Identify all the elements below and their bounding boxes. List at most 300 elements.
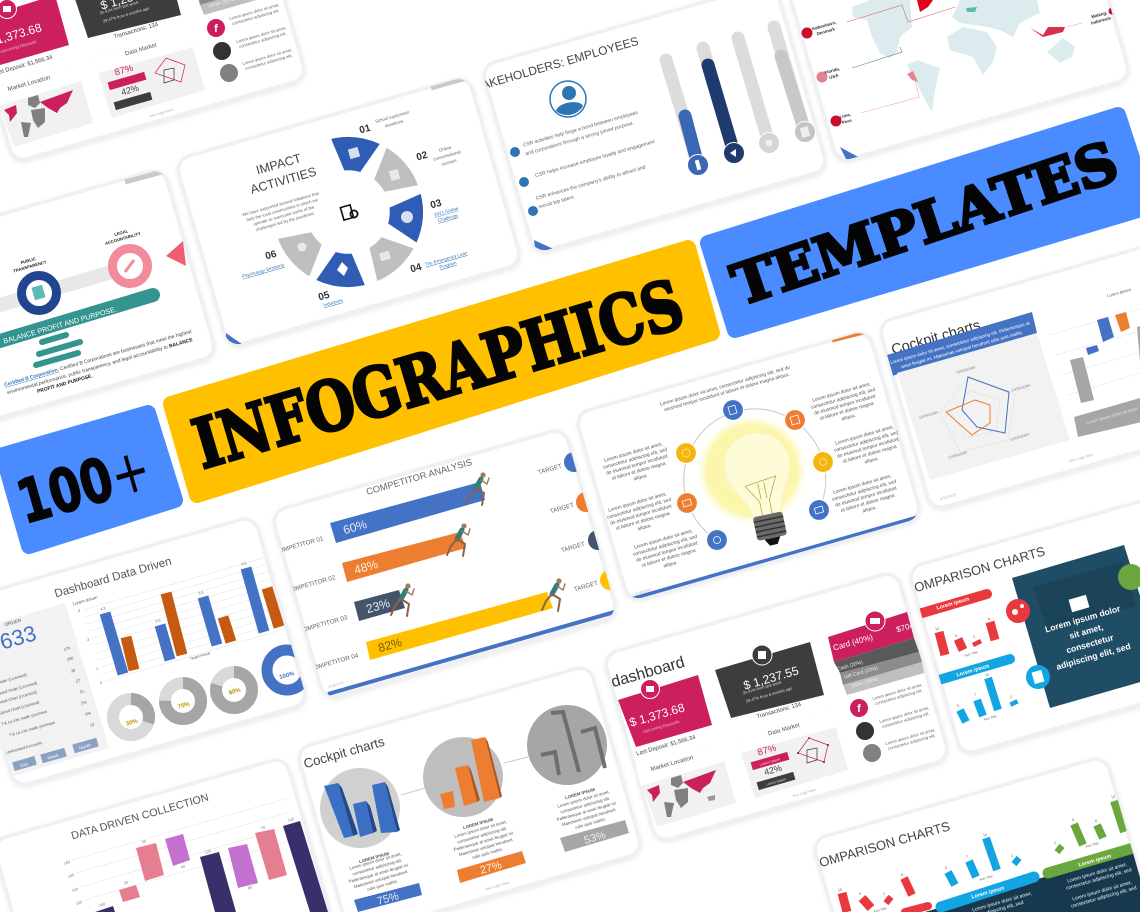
blue chart: 14: [985, 673, 989, 677]
surrounding text blocks: ut labore et dolore magna: [641, 548, 697, 569]
blue band: [880, 312, 1037, 378]
segment labels: School equipment: [374, 109, 410, 124]
bullet list: CSR enhances the company's ability to attract and: [535, 165, 646, 202]
connector lines: [847, 5, 1082, 113]
panel: dashboard: [603, 571, 950, 842]
percent box 53%: 53%: [583, 829, 607, 847]
bar chart: 3: [87, 638, 89, 642]
order panel: [0, 603, 109, 780]
description text: operate to overcome some of the: [253, 204, 315, 227]
blue chart: [941, 833, 1034, 907]
text column 1: consectetur adipiscing elit.: [352, 858, 403, 877]
panel: dashboard preview cropped at top left: [0, 0, 307, 162]
panel: light bulb infographic: [575, 330, 922, 601]
gray text band: [1074, 398, 1140, 437]
order panel: Week: [47, 752, 60, 761]
order panel: Month: [78, 742, 92, 751]
surrounding text blocks: do eiusmod tempor incididunt: [609, 503, 673, 527]
location labels: København,: [811, 20, 837, 31]
data market panel: Lorem Ipsum: [765, 777, 787, 787]
bullet list: CSR activities help forge a bond between employees: [522, 110, 639, 149]
icon circles: [1006, 564, 1140, 689]
pink arrow: [166, 241, 186, 266]
dark teal panel: consectetur: [1065, 632, 1115, 655]
blue chart: 2: [1009, 695, 1013, 699]
data market panel: Lorem Ipsum: [759, 757, 781, 767]
blue chart: 7: [973, 693, 977, 697]
pink deposit block: Upcoming Deposits: [642, 719, 681, 734]
market location map: Market Location: [650, 754, 695, 773]
text column 3: consectetur adipiscing elit.: [560, 796, 611, 815]
surrounding text blocks: do eiusmod tempor incididunt: [836, 436, 900, 460]
dark balance block: 29.47% from 6 months ago: [745, 685, 794, 704]
surrounding text blocks: Lorem ipsum dolor sit amet,: [634, 528, 693, 551]
surrounding text blocks: consectetur adipiscing elit, sed: [833, 430, 899, 454]
waterfall chart: [1050, 287, 1140, 403]
surrounding text blocks: Lorem ipsum dolor sit amet,: [604, 441, 663, 464]
circle: blue 3d bars: [320, 768, 400, 848]
percent box 75%: [354, 883, 422, 912]
text column 2: LOREM IPSUM: [462, 817, 494, 830]
panel: dashboard preview cropped at top left: Lorem ipsum dolor sit amet,: [236, 25, 287, 44]
bar chart: [72, 556, 292, 685]
order panel: ORDER: [4, 618, 23, 628]
dark balance block: $ 1,237.55: [742, 663, 801, 693]
surrounding text blocks: Lorem ipsum dolor sit amet,: [608, 491, 667, 514]
dark teal panel: adipiscing elit, sed: [1055, 641, 1132, 672]
dark teal panel: Lorem ipsum dolor: [1044, 603, 1122, 634]
data market panel: [736, 710, 848, 798]
order panel: 5%: [81, 699, 88, 706]
green chart: 6: [1094, 819, 1098, 823]
surrounding text blocks: consectetur adipiscing elit, sed: [602, 447, 668, 471]
segment labels: 06: [264, 249, 278, 262]
teal banner: [0, 295, 153, 347]
segment labels: Online: [438, 144, 452, 153]
dark teal panel: sit amet,: [1068, 622, 1104, 641]
text column 1: Maecenas volutpat hendrerit: [353, 869, 409, 889]
blue chart: [925, 659, 1015, 722]
white text on dark panel: [972, 861, 1138, 912]
radar chart: CATEGORY: [948, 450, 969, 460]
red chart: 2: [972, 635, 976, 639]
dark balance block: 35.41% from last week: [742, 680, 782, 695]
competitor bars: 82%: [377, 635, 404, 655]
ring: public transparency: PUBLIC: [20, 256, 36, 265]
red chart: Lorem ipsum: [936, 596, 970, 612]
green chart: Axis Title: [1085, 841, 1099, 849]
radar chart: CATEGORY: [956, 365, 977, 375]
panel: balance profit and purpose: [0, 168, 217, 439]
heading: Cockpit charts: [890, 318, 982, 358]
text column 2: [450, 817, 518, 864]
surrounding text blocks: aliqua.: [637, 523, 652, 532]
blue chart: Axis Title: [983, 714, 997, 722]
panel: dashboard preview cropped at top left: 29.47% from 6 months ago: [102, 5, 151, 24]
red chart: 8: [900, 873, 904, 877]
surrounding text blocks: ut labore et dolore magna: [840, 493, 896, 514]
social rows: Lorem ipsum dolor sit amet,: [885, 727, 936, 746]
green chart: Lorem ipsum: [1078, 853, 1112, 869]
heading: COMPARISON CHARTS: [903, 543, 1047, 598]
runner 3: [391, 583, 414, 616]
runner 2: [447, 523, 470, 556]
surrounding text blocks: aliqua.: [862, 505, 877, 514]
bar chart: 4.5: [241, 561, 247, 567]
dark balance block: Transactions: 134: [756, 702, 803, 720]
dark teal panel: [1012, 545, 1140, 708]
green chart: 14: [1111, 795, 1115, 799]
body text: environmental performance, public transparency, and legal accountability to BALANCE: [7, 337, 194, 396]
surrounding text blocks: Lorem ipsum dolor sit amet,: [833, 473, 892, 496]
blue chart: 5: [944, 866, 948, 870]
payment breakdown: Cash (20%): [836, 659, 864, 673]
surrounding text blocks: do eiusmod tempor incididunt: [635, 540, 699, 564]
ring arc: [684, 409, 826, 540]
ring: legal accountability: ACCOUNTABILITY: [104, 231, 141, 246]
segmented ring chart: [275, 135, 425, 289]
text column 3: odio quis mattis.: [575, 816, 606, 830]
body text: Certified B Corporation. Certified B Corporations are businesses that meet the highest: [4, 329, 193, 388]
data market panel: Data Market: [767, 723, 801, 737]
panel: dashboard preview cropped at top left: 87%: [113, 63, 135, 78]
green chart: 2: [1053, 841, 1057, 845]
panel: dashboard preview cropped at top left: f: [214, 23, 218, 35]
panel: data driven collection: [0, 757, 339, 912]
heading: dashboard: [609, 654, 687, 691]
segment labels: courses: [441, 157, 458, 167]
bar chart: 0: [100, 681, 102, 685]
ring: public transparency: TRANSPARENCY: [13, 259, 47, 274]
radar chart: CATEGORY: [1011, 383, 1032, 393]
surrounding text blocks: ut labore et dolore magna: [842, 444, 898, 465]
surrounding text blocks: Lorem ipsum dolor sit amet,: [835, 424, 894, 447]
waterfall chart: 70: [260, 825, 266, 831]
payment breakdown: Card (40%): [832, 632, 874, 653]
market location map: [636, 743, 736, 827]
heading: Cockpit charts: [302, 734, 387, 771]
green chart: [1048, 795, 1140, 873]
donut: 80%: [216, 672, 252, 708]
panel: dashboard preview cropped at top left: Lorem ipsum dolor sit amet,: [229, 2, 280, 21]
segment labels: 04: [409, 262, 423, 275]
text column 1: Lorem ipsum dolor sit amet,: [349, 851, 402, 871]
heading: Dashboard Data Driven: [53, 555, 173, 600]
panel: competitor analysis: [271, 424, 620, 699]
panel: dashboard preview cropped at top left: 42%: [120, 83, 140, 97]
runner 1: [466, 472, 489, 505]
percent box 27%: [457, 851, 526, 883]
banner: 100+: 100+: [9, 434, 159, 538]
blue chart: 7: [965, 855, 969, 859]
text column 1: Pellentesque at amet feugiat mi.: [348, 862, 410, 884]
target markers: TARGET: [537, 463, 563, 476]
panel: dashboard preview cropped at top left: Upcoming Deposits: [0, 39, 38, 54]
heading: DATA DRIVEN COLLECTION: [70, 792, 210, 842]
order panel: Unlicensed Accounts: [5, 740, 43, 755]
panel: dashboard data driven: [0, 516, 308, 787]
segment labels: 02: [415, 150, 429, 163]
heading: STAKEHOLDERS: EMPLOYEES: [466, 34, 640, 96]
panel: impact activities: [175, 76, 522, 350]
segment labels: 03: [429, 198, 443, 211]
blue chart: 14: [983, 833, 987, 837]
panel: dashboard preview cropped at top left: Transactions: 134: [113, 22, 160, 40]
competitor labels: [281, 536, 358, 670]
vertical progress bars: [666, 27, 816, 176]
text column 3: Pellentesque at amet feugiat mi.: [556, 800, 618, 822]
panel: cockpit 3d bars: Your Logo Here: [484, 881, 510, 891]
location labels: [802, 8, 1116, 126]
blue band: Lorem ipsum dolor sit amet, consectetur adipiscing elit. Pellentesque at: [890, 320, 1031, 365]
location labels: Denmark: [816, 26, 836, 36]
waterfall chart: 160: [67, 873, 75, 879]
blue chart: 2: [1010, 854, 1014, 858]
red chart: 10: [935, 627, 939, 631]
dark balance block: [715, 642, 824, 720]
donut: 30%: [113, 699, 149, 735]
competitor bars: 23%: [365, 596, 392, 616]
competitor labels: COMPETITOR 01: [274, 535, 325, 556]
green chart: 9: [1071, 818, 1075, 822]
gray text band: Lorem ipsum dolor sit amet: [1086, 406, 1139, 425]
donut: 100%: [267, 650, 307, 690]
social rows: [850, 682, 937, 762]
light bulb: [698, 416, 806, 546]
segment labels: Program: [439, 260, 457, 270]
surrounding text blocks: Lorem ipsum dolor sit amet, consectetur adipiscing elit, sed do: [659, 365, 791, 408]
blue chart: 5: [956, 704, 960, 708]
text column 1: odio quis mattis.: [367, 878, 398, 892]
surrounding text blocks: ut labore et dolore magna: [611, 461, 667, 482]
target markers: [538, 452, 611, 591]
radar chart: CATEGORY: [1010, 432, 1031, 442]
white text on dark panel: consectetur adipiscing elit, sed: [1065, 867, 1133, 892]
blue chart: Axis Title: [979, 874, 993, 882]
banner: templates: TEMPLATES: [724, 129, 1126, 319]
segment labels: 05: [317, 290, 331, 303]
panel: light bulb infographic: 4/18/2025: [634, 588, 652, 596]
white text on dark panel: consectetur adipiscing elit, sed: [1070, 885, 1138, 910]
percent box 53%: [560, 820, 629, 852]
icon: clipboard gear: [340, 205, 358, 220]
text column 2: consectetur adipiscing elit.: [457, 826, 508, 845]
location labels: Indonesia: [1090, 15, 1112, 26]
bar chart: 4.3: [100, 606, 106, 612]
bar chart: Lorem Ipsum: [72, 595, 98, 606]
donut: 30%: 30%: [125, 718, 139, 728]
social rows: consectetur adipiscing elit.: [887, 733, 936, 751]
segment labels: Psychology Sessions: [241, 262, 285, 279]
order panel: 12: [89, 721, 96, 728]
waterfall chart: 120: [75, 900, 83, 906]
waterfall chart: 60: [247, 885, 253, 891]
panel: comparison charts upper: [903, 484, 1140, 755]
target markers: TARGET: [560, 541, 586, 554]
body text: PROFIT AND PURPOSE.: [36, 373, 94, 395]
donut: 80%: 80%: [228, 687, 242, 697]
payment breakdown: $704: [895, 621, 915, 634]
teal banner: BALANCE PROFIT AND PURPOSE.: [2, 304, 118, 346]
panel: dashboard preview cropped at top left: Lorem ipsum dolor sit amet,: [242, 47, 293, 66]
social rows: consectetur adipiscing elit.: [881, 711, 930, 729]
pink deposit block: [618, 675, 712, 757]
surrounding text blocks: consectetur adipiscing elit, sed: [810, 387, 876, 411]
order panel: 275: [63, 645, 72, 652]
red chart: 5: [858, 892, 862, 896]
panel: cockpit radar chart: 4/18/2025: [939, 493, 957, 501]
white text on dark panel: Lorem ipsum dolor sit amet,: [1067, 862, 1128, 885]
red chart: 8: [987, 617, 991, 621]
circle: orange 3d bars: [423, 737, 503, 817]
red chart: [838, 873, 928, 912]
bullet list: recruit top talent.: [538, 194, 576, 210]
bar chart: 3.5: [198, 590, 204, 596]
bar chart: Target Actual: [189, 651, 211, 661]
bullet list: and corporations through a strong joined purpose.: [525, 120, 635, 157]
panel: world map: [784, 0, 1131, 162]
donut: 75%: 75%: [177, 701, 191, 711]
target markers: TARGET: [573, 580, 599, 593]
panel: cockpit radar chart: Your Logo Here: [1068, 453, 1094, 463]
segment labels: [241, 109, 470, 308]
order panel: Day: [20, 761, 29, 768]
surrounding text blocks: aliqua.: [663, 560, 678, 569]
waterfall chart: 50: [141, 839, 147, 845]
order panel: 38: [70, 667, 77, 674]
percent box 75%: 75%: [376, 890, 400, 908]
red chart: 10: [838, 888, 842, 892]
blue chart: Lorem ipsum: [971, 885, 1005, 901]
competitor labels: COMPETITOR 02: [286, 574, 337, 595]
text column 2: odio quis mattis.: [472, 846, 503, 860]
blue chart: Lorem ipsum: [956, 663, 990, 679]
percent box 27%: 27%: [479, 859, 503, 877]
description text: help the local communities in which we: [246, 197, 319, 222]
panel: dashboard preview cropped at top left: Market Location: [7, 74, 52, 93]
waterfall chart: 140: [71, 887, 79, 893]
panel: dashboard preview cropped at top left: consectetur adipiscing elit.: [238, 31, 287, 49]
order panel: 7 & La Lite made purchase: [8, 719, 56, 738]
radar chart: [897, 333, 1070, 480]
text column 2: Pellentesque at amet feugiat mi.: [453, 830, 515, 852]
data market panel: 87%: [756, 743, 778, 758]
payment breakdown: Other (20%): [851, 676, 879, 690]
text column 3: [553, 787, 621, 834]
waterfall chart: 140: [287, 817, 295, 823]
banner: infographics: INFOGRAPHICS: [185, 265, 692, 485]
surrounding text blocks: ut labore et dolore magna: [819, 401, 875, 422]
location labels: Peru: [841, 118, 853, 125]
location labels: USA: [829, 72, 840, 80]
circle: gray 3d bars: [527, 705, 607, 785]
white text on dark panel: Lorem ipsum dolor sit amet,: [1072, 880, 1133, 903]
text column 3: Maecenas volutpat hendrerit: [561, 807, 617, 827]
surrounding text blocks: ut labore et dolore magna: [615, 511, 671, 532]
donut: 75%: [165, 683, 201, 719]
surrounding text blocks: consectetur adipiscing elit, sed: [632, 534, 698, 558]
target markers: TARGET: [549, 502, 575, 515]
location labels: Lima,: [839, 112, 851, 120]
icon: person: [550, 81, 586, 117]
waterfall chart: Lorem Ipsum: [1107, 287, 1132, 298]
ring: legal accountability: [103, 225, 148, 284]
runner 4: [542, 578, 565, 611]
panel: cockpit radar chart: [878, 239, 1140, 510]
description text: We have supported several initiatives that: [242, 190, 320, 217]
heading: impact activities: IMPACT: [254, 151, 303, 177]
stacked pills: [36, 335, 80, 365]
pink deposit block: $ 1,373.68: [628, 700, 687, 730]
red chart: Axis Title: [964, 650, 978, 658]
panel: dashboard preview cropped at top left: consectetur adipiscing elit.: [231, 8, 280, 26]
red chart: 5: [954, 634, 958, 638]
segment labels: Inductees: [323, 297, 344, 308]
waterfall chart: [63, 799, 328, 912]
bar chart: 2.5: [155, 618, 161, 624]
panel: cockpit 3d bars: [296, 665, 643, 912]
donut: 100%: 100%: [279, 671, 296, 681]
surrounding text blocks: aliqua.: [633, 473, 648, 482]
competitor labels: COMPETITOR 03: [298, 614, 349, 635]
text column 3: Lorem ipsum dolor sit amet,: [557, 789, 610, 809]
order panel: 27: [75, 677, 82, 684]
text column 1: [345, 850, 413, 896]
waterfall chart: 40: [180, 864, 186, 870]
waterfall chart: 100: [98, 902, 106, 908]
bar chart: 1: [96, 667, 98, 671]
order panel: 6%: [85, 710, 92, 717]
surrounding text blocks: do eiusmod tempor incididunt: [834, 485, 898, 509]
segment labels: donations: [384, 118, 405, 128]
order panel: 7 & La Lite made purchase: [0, 708, 48, 727]
panel: stakeholders employees: [466, 0, 828, 256]
surrounding text blocks: consectetur adipiscing elit, sed: [831, 479, 897, 503]
segment labels: 2021 Global: [434, 206, 459, 217]
text column 2: Lorem ipsum dolor sit amet,: [454, 819, 507, 839]
surrounding text blocks: eiusmod tempor incididunt ut labore et dolore magna aliqua.: [664, 372, 790, 413]
social rows: Lorem ipsum dolor sit amet,: [879, 705, 930, 724]
bullet list: [510, 110, 656, 216]
red chart: [905, 594, 995, 658]
dark panel: [925, 850, 1140, 912]
waterfall chart: 20: [123, 880, 129, 886]
social rows: Lorem ipsum dolor sit amet,: [872, 682, 923, 701]
waterfall chart: 180: [63, 860, 71, 866]
heading: COMPARISON CHARTS: [808, 818, 952, 873]
segment labels: Challenge: [437, 212, 459, 223]
payment breakdown: [828, 611, 924, 695]
payment breakdown: Gift Card (20%): [843, 665, 879, 681]
competitor bars: 60%: [342, 517, 369, 537]
surrounding text blocks: Lorem ipsum dolor sit amet,: [812, 381, 871, 404]
social rows: consectetur adipiscing elit.: [874, 688, 923, 706]
surrounding text blocks: do eiusmod tempor incididunt: [813, 393, 877, 417]
panel: comparison charts lower: [808, 756, 1140, 912]
segment labels: conversational: [433, 149, 461, 162]
segment labels: 01: [358, 123, 372, 136]
description text: challenges led by the pandemic.: [255, 210, 316, 232]
text column 2: Maecenas volutpat hendrerit: [458, 837, 514, 857]
ring: legal accountability: LEGAL: [114, 228, 129, 237]
data market panel: 42%: [763, 763, 783, 777]
competitor bars: 48%: [353, 557, 380, 577]
panel: dashboard preview cropped at top left: Your Logo Here: [149, 108, 173, 118]
bullet list: CSR helps increase employee loyalty and engagement: [535, 139, 656, 179]
order panel: 51: [79, 688, 86, 695]
data market panel: Your Logo Here: [792, 788, 816, 798]
heading: impact activities: ACTIVITIES: [249, 165, 318, 197]
